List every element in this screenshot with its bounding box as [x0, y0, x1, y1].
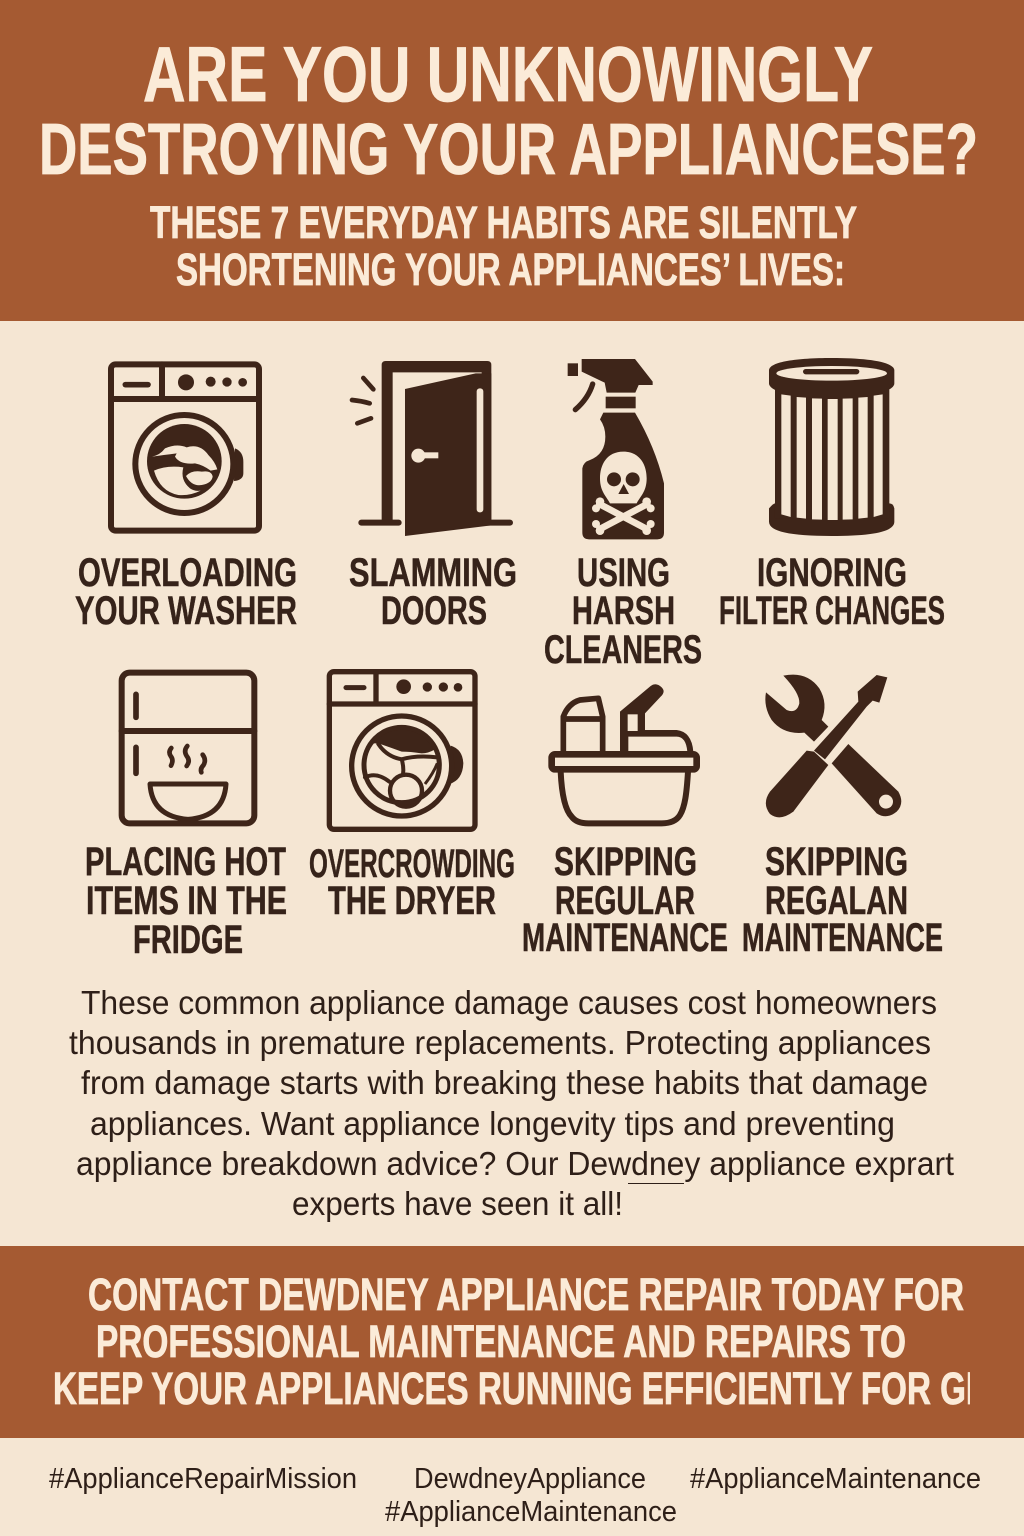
label: ignoring filter changes: IGNORING [757, 551, 907, 595]
body paragraph: experts have seen it all! [292, 1185, 623, 1222]
icon: air filter [769, 358, 894, 536]
label: using harsh cleaners: CLEANERS [544, 628, 702, 672]
label: ignoring filter changes [719, 551, 945, 633]
label: skipping regular maintenance: REGULAR [555, 879, 695, 923]
body paragraph: appliance breakdown advice? Our Dewdney appliance exprart [76, 1145, 954, 1182]
title [39, 30, 978, 190]
label: skipping regalan maintenance [742, 840, 943, 960]
label: slamming doors: DOORS [381, 589, 487, 633]
skull [592, 452, 655, 535]
label: skipping regalan maintenance: SKIPPING [765, 840, 908, 884]
icon: harsh cleaner spray bottle [568, 359, 664, 539]
hashtags: DewdneyAppliance [414, 1463, 646, 1495]
call to action band [0, 1246, 1024, 1438]
label: skipping regular maintenance: MAINTENANCE [522, 916, 728, 960]
label: overcrowding the dryer: THE DRYER [328, 879, 496, 923]
body paragraph: appliances. Want appliance longevity tips and preventing [90, 1105, 895, 1142]
body paragraph [69, 984, 954, 1222]
label: placing hot items in the fridge: ITEMS IN THE [86, 879, 287, 923]
hashtags: #ApplianceRepairMission [49, 1463, 357, 1495]
header panel [0, 0, 1024, 321]
icon: hot bowl in fridge [122, 673, 254, 823]
label: overloading your washer: OVERLOADING [78, 551, 297, 595]
label: using harsh cleaners: HARSH [572, 589, 675, 633]
label: skipping regular maintenance [522, 840, 728, 960]
body paragraph: from damage starts with breaking these habits that damage [81, 1064, 928, 1101]
label: skipping regalan maintenance: REGALAN [765, 879, 908, 923]
label: placing hot items in the fridge: FRIDGE [133, 918, 243, 962]
hashtags [49, 1463, 981, 1528]
label: placing hot items in the fridge: PLACING HOT [85, 840, 286, 884]
body paragraph: These common appliance damage causes cost homeowners [81, 984, 937, 1021]
icon: cleaning basket [552, 684, 697, 823]
icon: overcrowded dryer [329, 672, 475, 829]
label: overcrowding the dryer: OVERCROWDING [309, 842, 515, 886]
body paragraph: thousands in premature replacements. Protecting appliances [69, 1024, 931, 1061]
icon: slamming door [352, 361, 510, 536]
hashtags: #ApplianceMaintenance [385, 1496, 677, 1528]
hashtags: #ApplianceMaintenance [690, 1463, 981, 1495]
icon: wrench and screwdriver [765, 675, 901, 817]
subtitle [150, 197, 857, 295]
label: slamming doors [349, 551, 517, 633]
label: using harsh cleaners [544, 551, 702, 672]
label: overcrowding the dryer [309, 842, 515, 923]
label: slamming doors: SLAMMING [349, 551, 517, 595]
label: skipping regular maintenance: SKIPPING [554, 840, 697, 884]
label: overloading your washer: YOUR WASHER [75, 589, 297, 633]
label: placing hot items in the fridge [85, 840, 287, 962]
label: using harsh cleaners: USING [577, 551, 670, 595]
icon: overloaded washer [111, 364, 259, 531]
label: overloading your washer [75, 551, 297, 633]
